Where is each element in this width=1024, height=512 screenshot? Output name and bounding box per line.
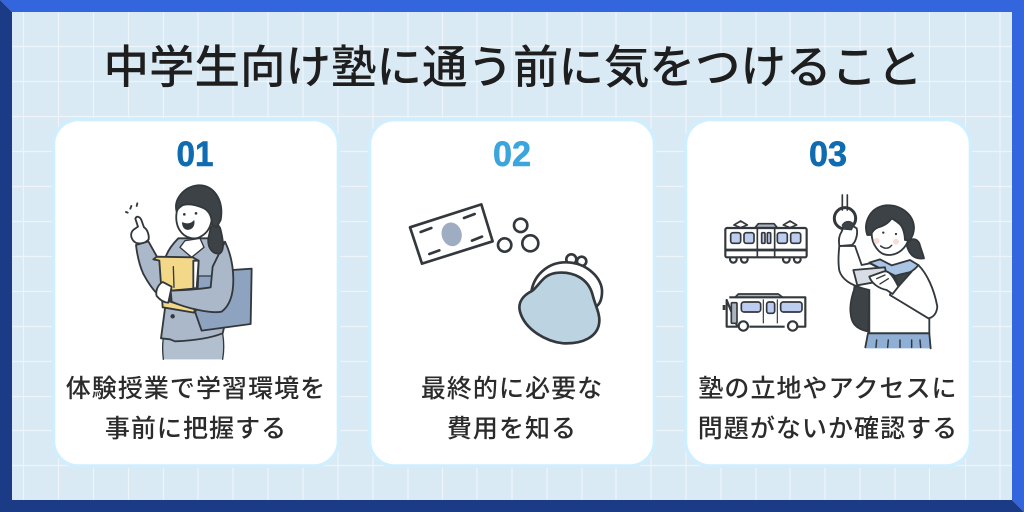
title: 中学生向け塾に通う前に気をつけること [103,42,923,93]
icon: banknote, coins and purse [410,204,602,343]
text: description 1: 体験授業で学習環境を [66,375,326,403]
card 2 background [370,120,654,466]
text: description 1 [66,375,326,443]
card 1 background [54,120,338,466]
icon: woman with documents and bag [126,185,252,359]
text: description 2: 最終的に必要な [421,375,603,403]
icon: student on train with smartphone [834,195,937,348]
text: description 2 [421,375,603,443]
number 01: 01 [176,135,214,174]
card 3 background [686,120,970,466]
icon: bus [724,294,805,331]
text: description 3: 塾の立地やアクセスに [698,375,958,403]
text: description 2: 費用を知る [447,415,577,443]
number 03: 03 [809,135,847,174]
text: description 3 [698,375,958,443]
number 02: 02 [493,135,531,174]
panel: 02 cost [370,120,654,466]
icon: train [725,221,807,263]
panel: 01 trial lesson [54,120,338,466]
text: description 3: 問題がないか確認する [698,415,958,443]
panel: 03 access [686,120,970,466]
text: description 1: 事前に把握する [105,415,287,443]
